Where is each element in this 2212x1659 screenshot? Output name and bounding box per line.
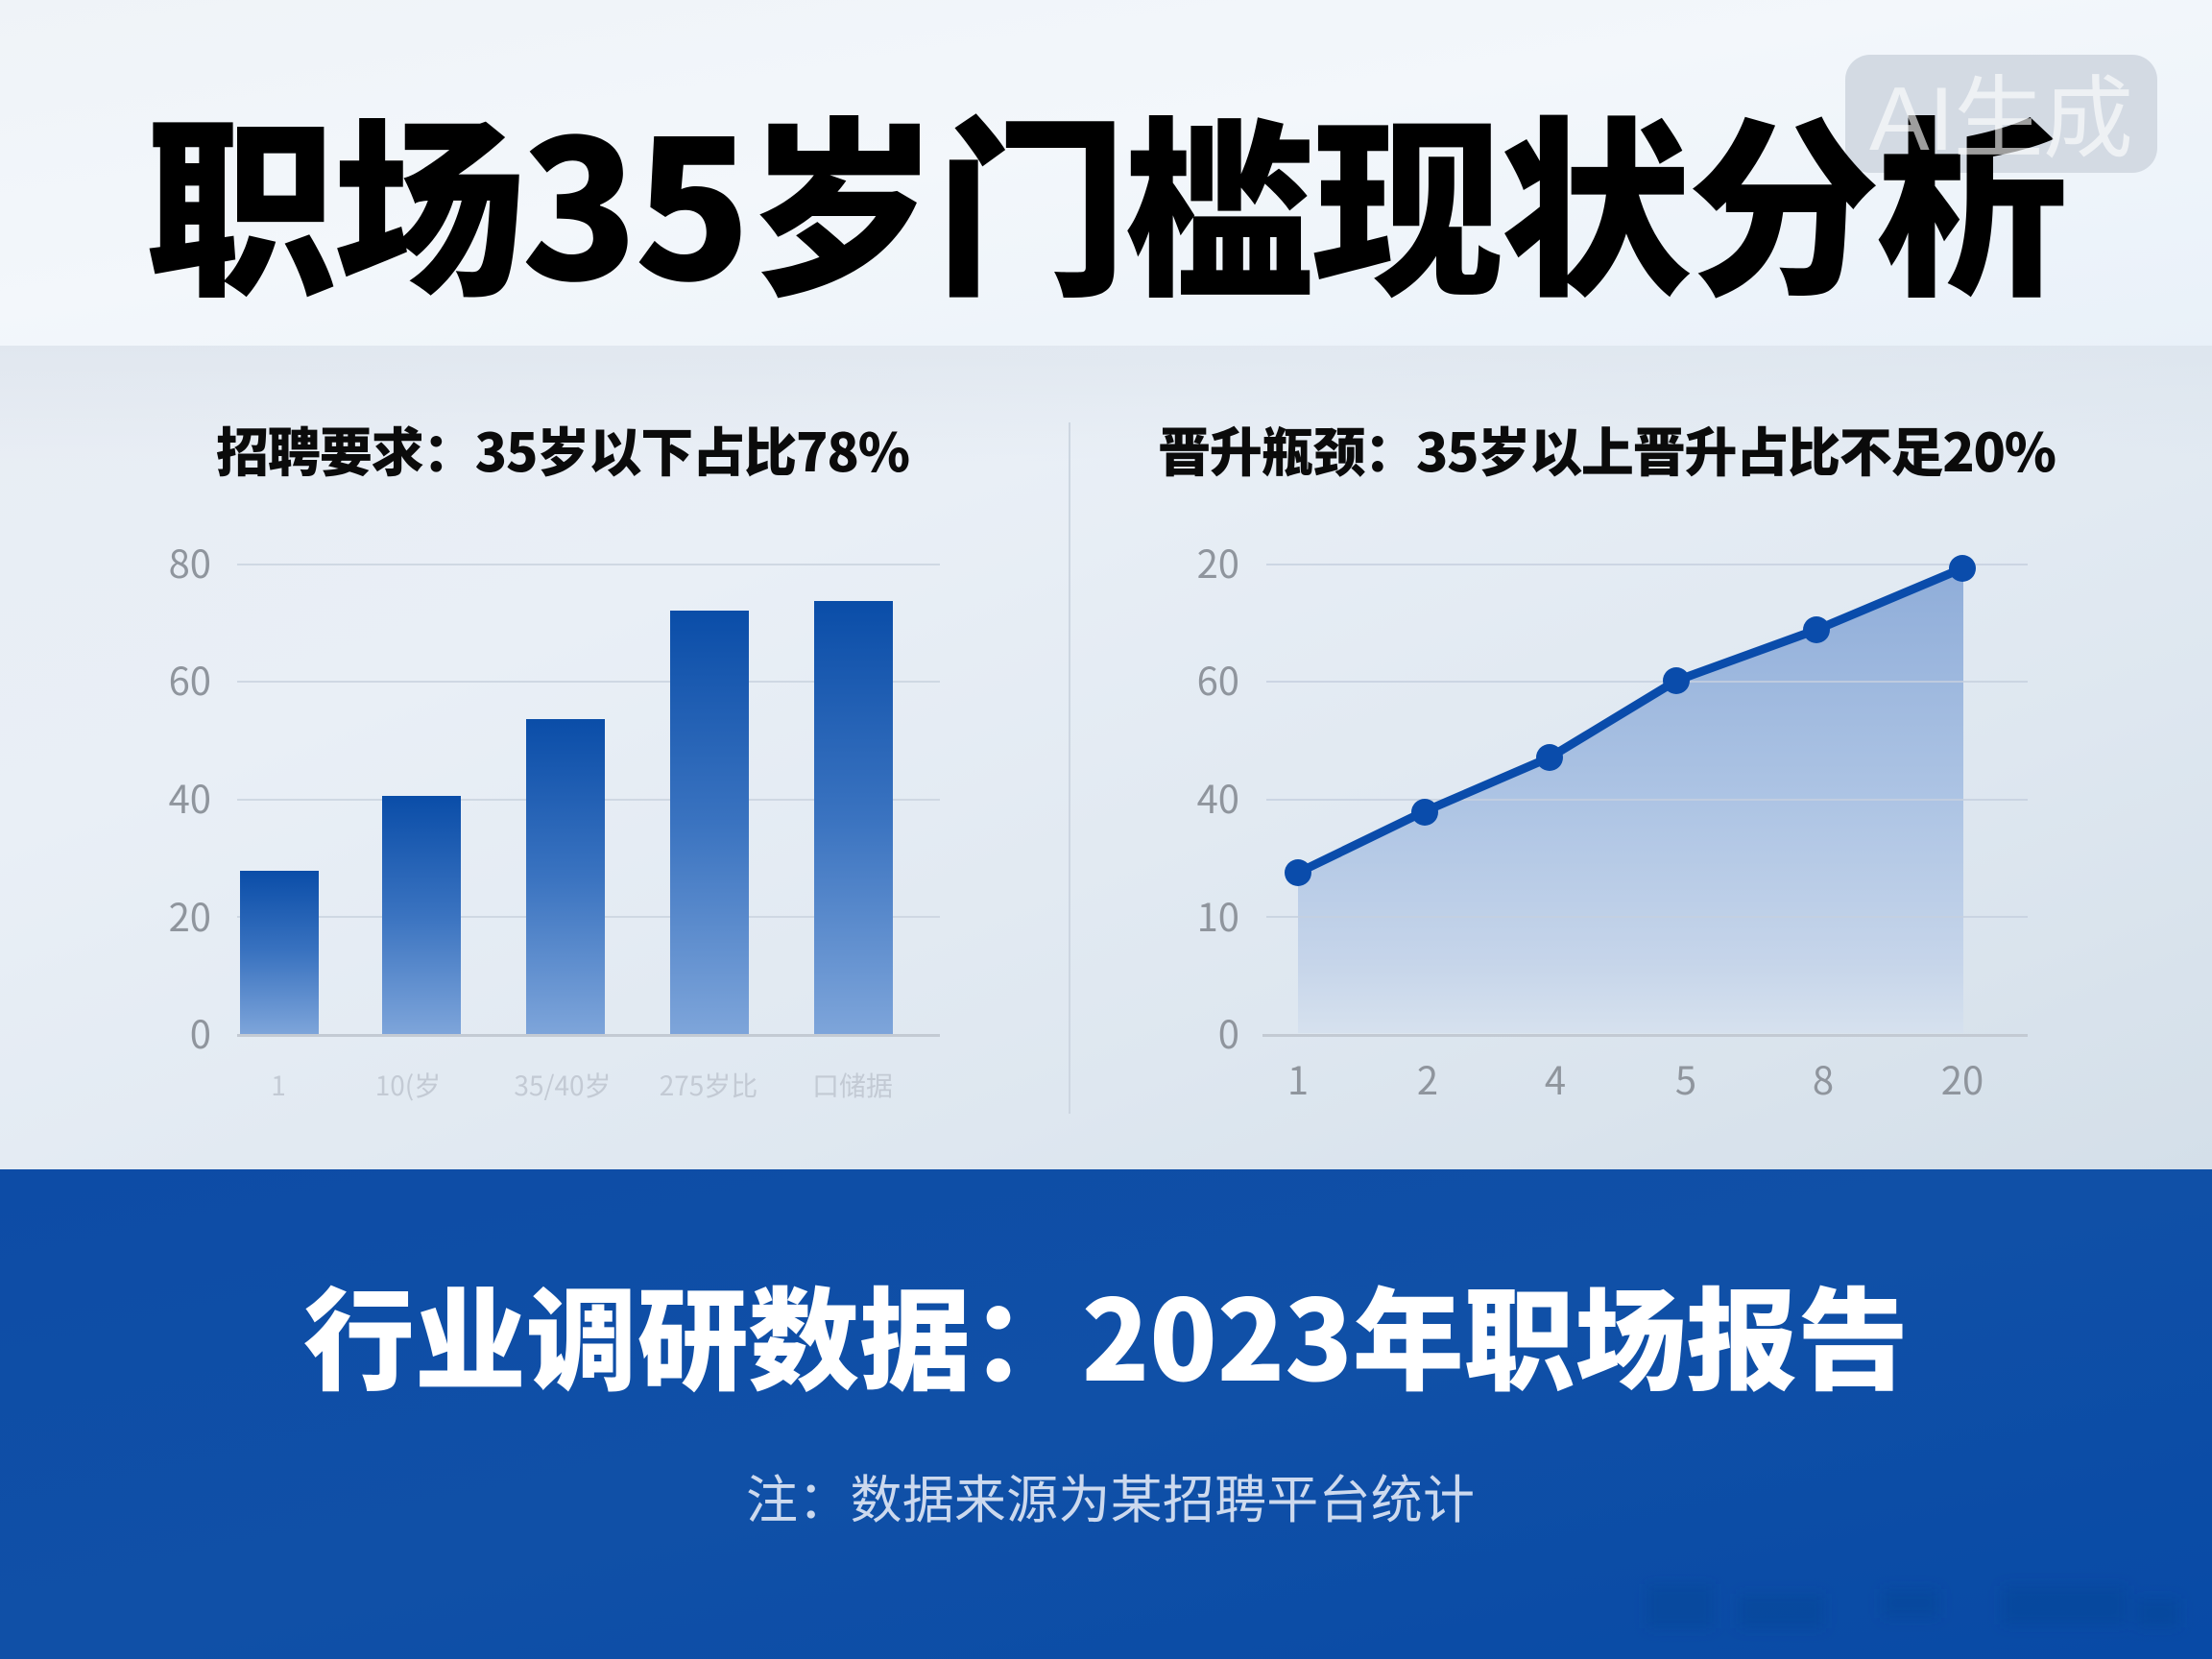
- footnote: 注：数据来源为某招聘平台统计: [746, 1457, 1475, 1533]
- bar chart grid lines: [237, 565, 940, 917]
- bar chart y axis labels: 0: [190, 1004, 211, 1060]
- bar chart y axis labels: 60: [169, 651, 211, 707]
- bar chart: recruitment: [169, 534, 940, 1104]
- bar chart y axis labels: 80: [169, 534, 211, 589]
- line chart x axis labels: 2: [1417, 1050, 1438, 1106]
- line chart x axis labels: 5: [1675, 1050, 1696, 1106]
- title: 职场35岁门槛现状分析: [145, 57, 2068, 335]
- blurred watermark smudge: [1647, 1584, 2179, 1628]
- bars: [240, 601, 893, 1035]
- line chart x axis labels: 1: [1287, 1050, 1309, 1106]
- line chart grid lines: [1266, 565, 2028, 917]
- line chart x axis labels: 4: [1545, 1050, 1566, 1106]
- line chart x axis labels: [1287, 1050, 1984, 1106]
- line chart y axis labels: 0: [1218, 1004, 1239, 1060]
- bar chart x axis labels: [271, 1066, 893, 1104]
- bar chart x axis labels: 10(岁: [375, 1066, 441, 1104]
- footer heading: 行业调研数据：2023年职场报告: [303, 1252, 1909, 1413]
- line chart y axis labels: 40: [1197, 769, 1239, 825]
- bar chart y axis labels: 20: [169, 887, 211, 943]
- divider between charts: [1069, 422, 1070, 1114]
- bar chart x axis labels: 口储据: [812, 1066, 893, 1104]
- header background: [0, 0, 2212, 346]
- bar chart baseline: [237, 1034, 940, 1037]
- data points: [1285, 555, 1976, 886]
- line chart y axis labels: 20: [1197, 534, 1239, 589]
- bar chart x axis labels: 35/40岁: [514, 1066, 612, 1104]
- line chart: promotion: [1197, 534, 2028, 1106]
- watermark label: AI生成: [1869, 68, 2133, 169]
- bar chart y axis labels: 40: [169, 769, 211, 825]
- bar chart x axis labels: 1: [271, 1066, 286, 1104]
- watermark badge background: [1845, 55, 2157, 173]
- line chart y axis labels: [1197, 534, 1239, 1060]
- trend line: [1298, 568, 1962, 873]
- chart panel background: [0, 346, 2212, 1169]
- bar chart y axis labels: [169, 534, 211, 1060]
- line chart area: [1298, 568, 1963, 1033]
- heading: promotion bottleneck: 晋升瓶颈：35岁以上晋升占比不足20%: [1158, 410, 2056, 487]
- bar chart x axis labels: 275岁比: [660, 1066, 757, 1104]
- footer background: [0, 1169, 2212, 1659]
- line chart y axis labels: 10: [1197, 887, 1239, 943]
- line chart x axis labels: 20: [1941, 1050, 1984, 1106]
- line chart baseline: [1262, 1034, 2028, 1037]
- heading: recruitment requirement: 招聘要求：35岁以下占比78%: [216, 410, 910, 487]
- line chart x axis labels: 8: [1813, 1050, 1834, 1106]
- line chart y axis labels: 60: [1197, 651, 1239, 707]
